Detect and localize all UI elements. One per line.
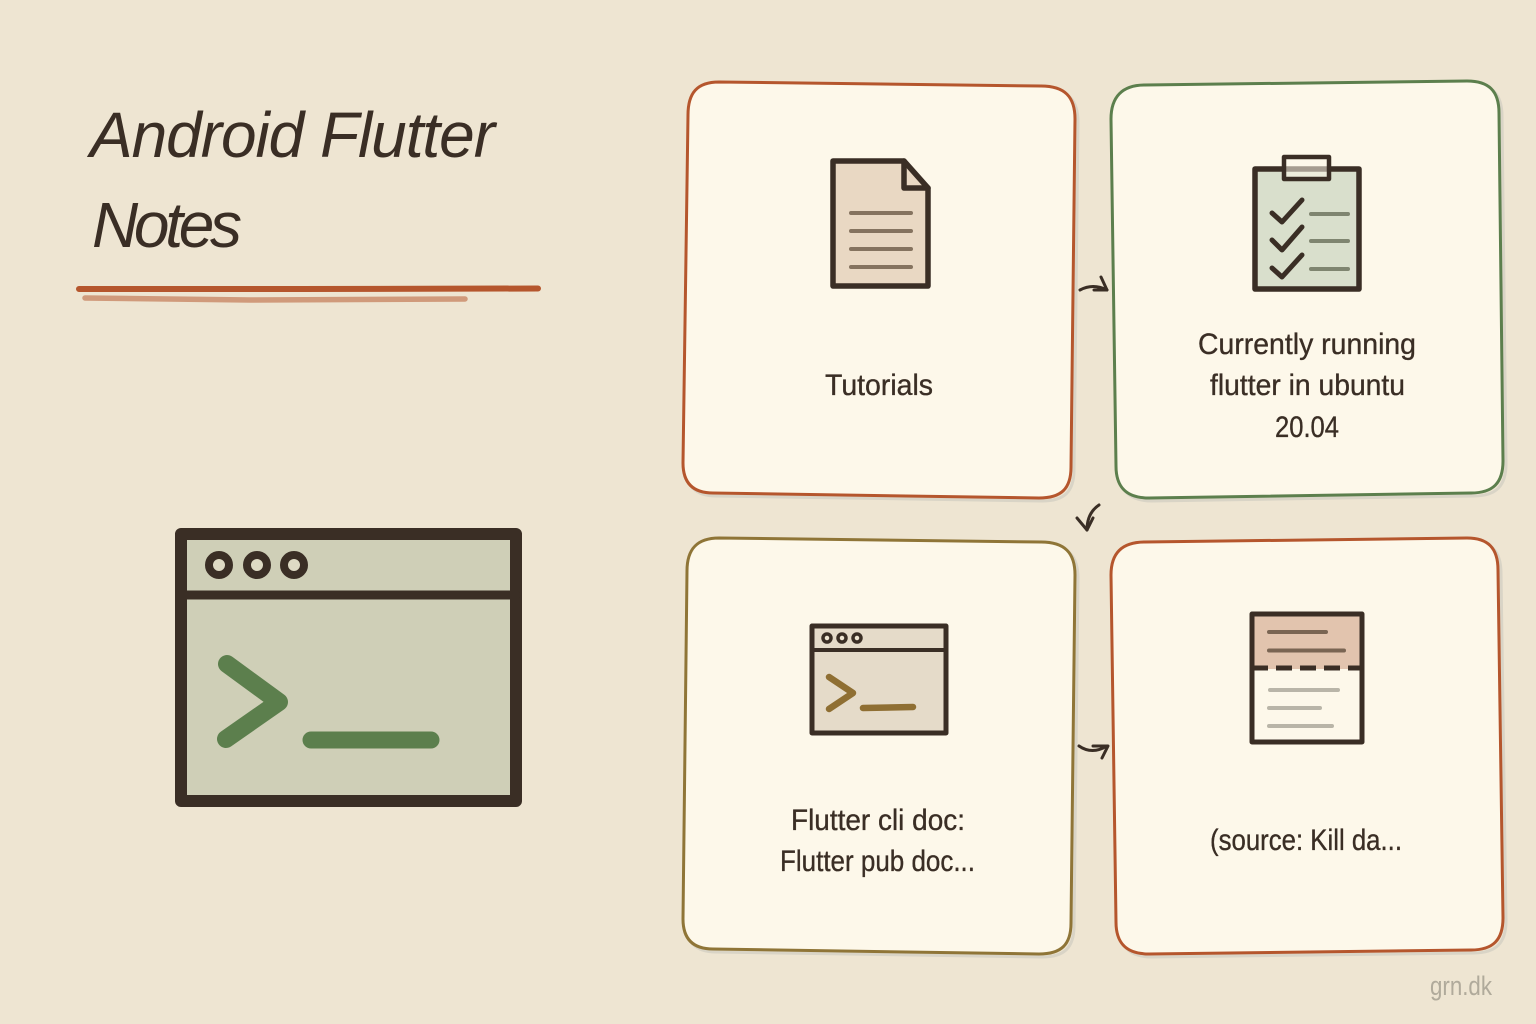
panel: flutter cli doc [683,538,1078,957]
icon: split document [1252,614,1362,742]
label: currently running [1198,328,1416,444]
arrow: cli doc to source [1079,746,1108,758]
label: flutter docs: Flutter cli doc: [791,804,965,837]
label: currently running: Currently running [1198,328,1416,361]
label: currently running: 20.04 [1275,411,1339,444]
icon: small terminal window [812,626,946,733]
label: flutter docs: Flutter pub doc... [780,845,975,878]
title underline [79,288,538,300]
title [86,99,498,261]
icon: checklist clipboard [1255,157,1359,289]
label: flutter docs [780,804,975,878]
watermark: grn.dk [1430,971,1492,1001]
title: Notes [92,189,242,261]
icon: large terminal window [181,534,516,801]
panel: source [1111,538,1506,957]
label: currently running: flutter in ubuntu [1210,369,1405,402]
arrow: tutorials to ubuntu [1080,277,1107,290]
panel: tutorials [683,82,1078,501]
icon: document [833,161,928,286]
panel: currently running [1111,81,1506,501]
title: Android Flutter [86,99,498,171]
arrow: ubuntu to cli doc [1077,505,1099,530]
label: tutorials: Tutorials [825,369,933,402]
label: source: (source: Kill da... [1210,824,1402,857]
